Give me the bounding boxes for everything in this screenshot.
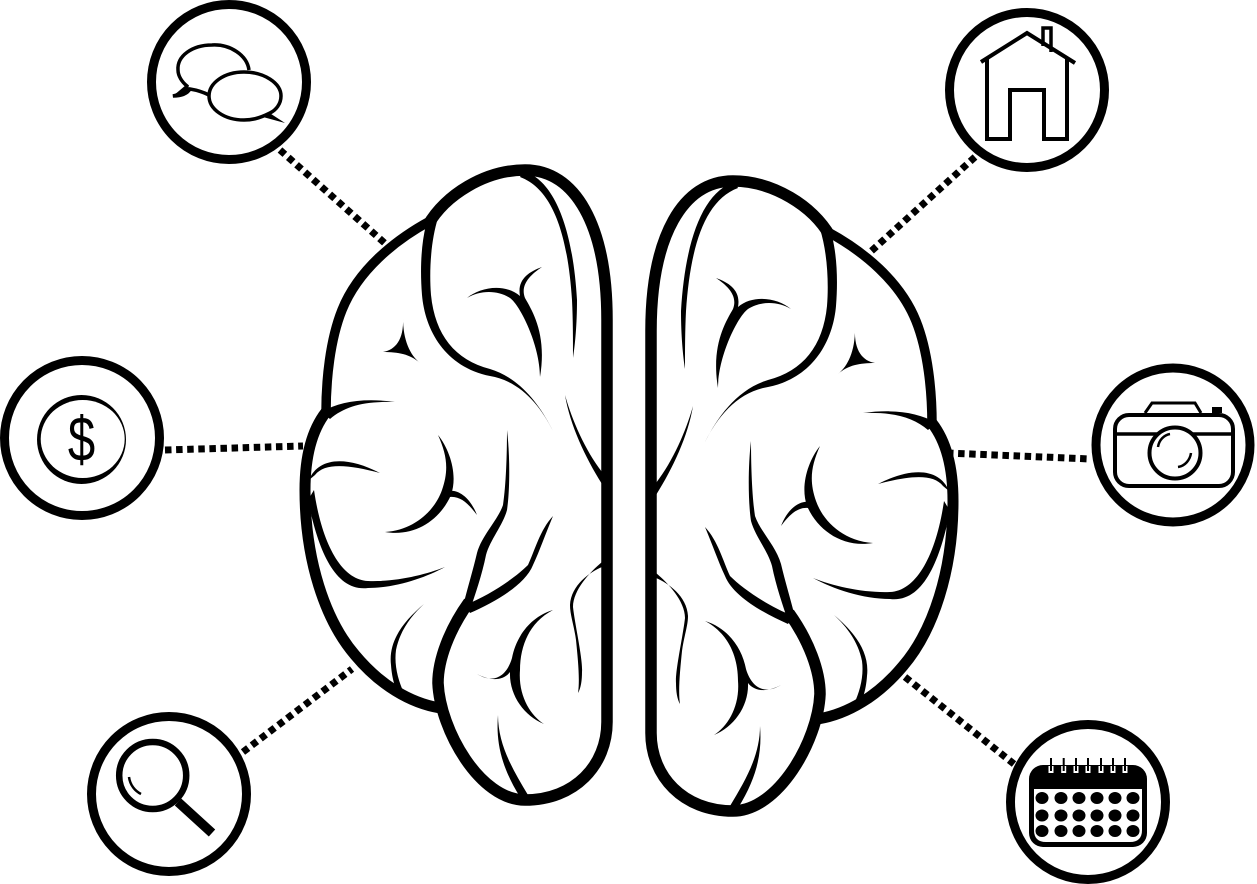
- icon: house: [950, 12, 1104, 168]
- connector: camera to brain: [947, 453, 1091, 459]
- icon: dollar coin: [4, 360, 160, 516]
- connector: house to brain: [867, 157, 975, 255]
- brain: right hemisphere: [651, 181, 953, 811]
- icon: dollar coin: $: [68, 404, 95, 474]
- connector: dollar to brain: [165, 446, 303, 450]
- connector: calendar to brain: [905, 677, 1014, 764]
- brain: left hemisphere: [305, 170, 607, 800]
- connector: speech to brain: [280, 150, 388, 246]
- icon: magnifying glass: [92, 716, 246, 872]
- icon: camera: [1096, 368, 1250, 522]
- icon: speech bubbles: [152, 4, 306, 160]
- connector: search to brain: [243, 669, 352, 752]
- icon: calendar: [1010, 724, 1166, 880]
